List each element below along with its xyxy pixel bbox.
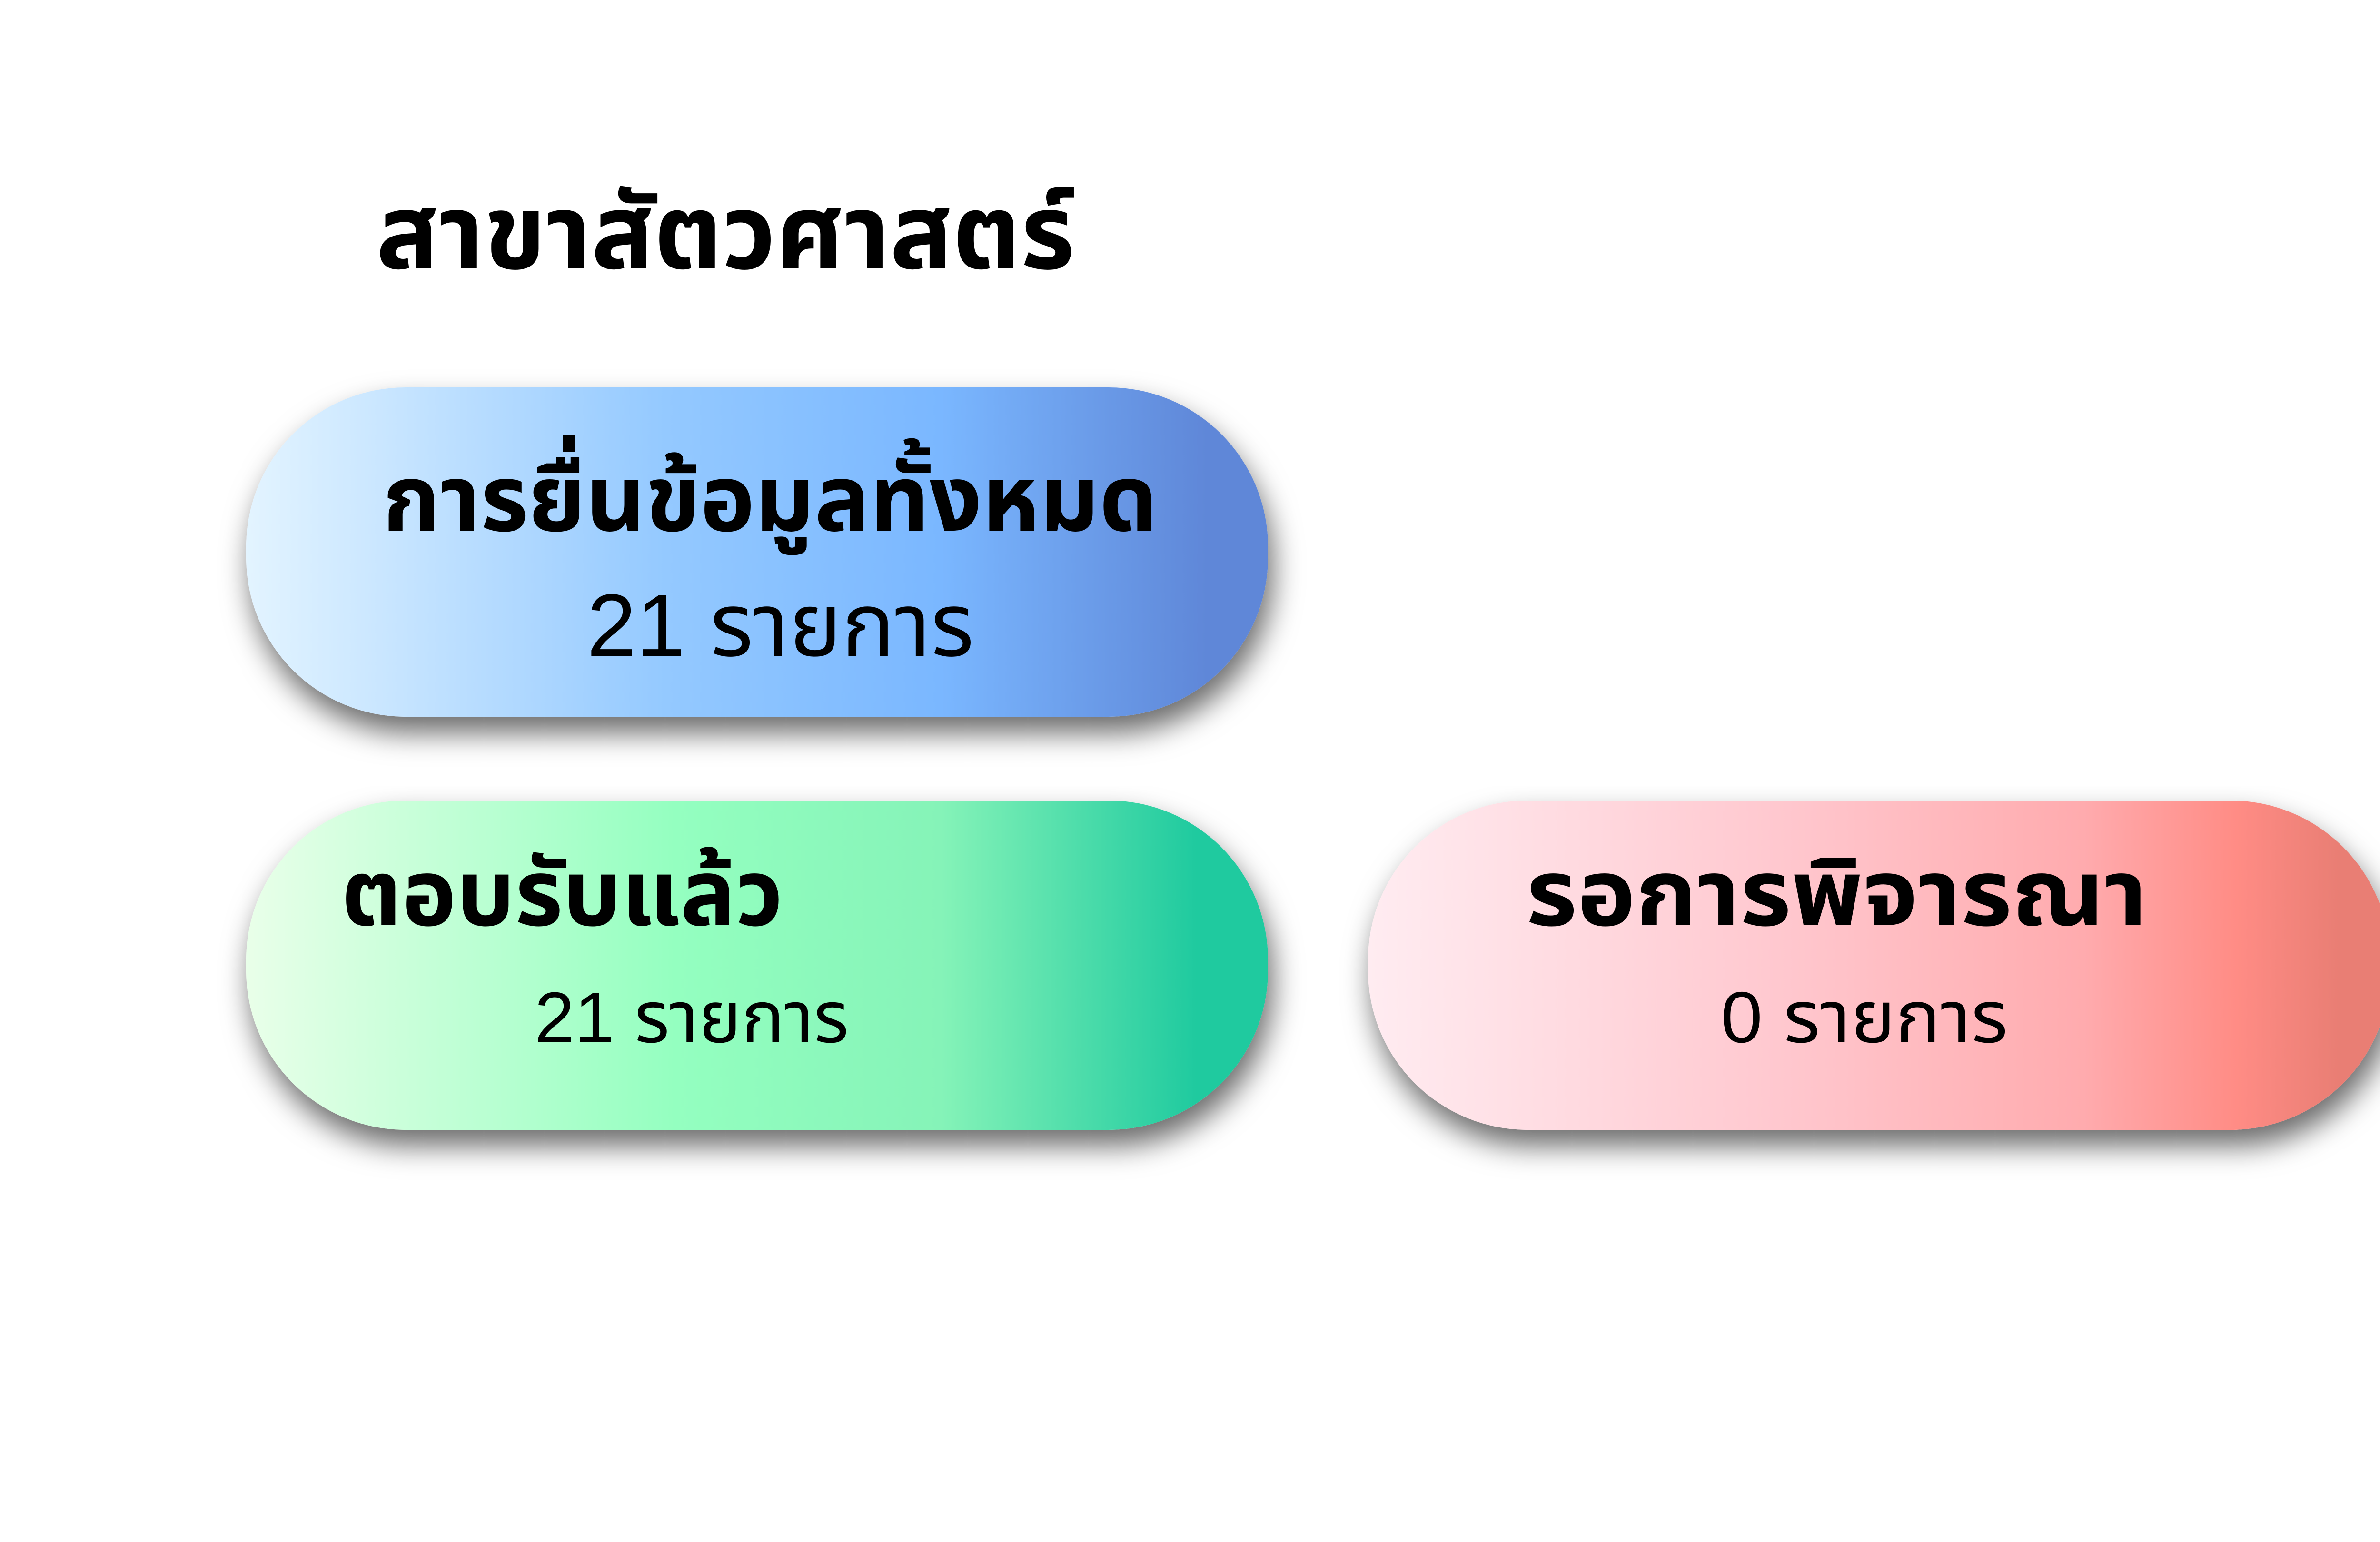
panel: pending <box>1368 801 2380 1130</box>
heading: all submissions: การยื่นข้อมูลทั้งหมด <box>383 447 1158 551</box>
count: pending: 0 รายการ <box>1721 977 2008 1058</box>
count: accepted: 21 รายการ <box>535 977 849 1058</box>
heading: pending: รอการพิจารณา <box>1526 842 2147 945</box>
heading: accepted: ตอบรับแล้ว <box>341 842 783 945</box>
title: สาขาสัตวศาสตร์ <box>376 175 1075 291</box>
panel: all submissions <box>246 387 1268 717</box>
panel: accepted <box>246 801 1268 1130</box>
count: all submissions: 21 รายการ <box>587 576 974 675</box>
